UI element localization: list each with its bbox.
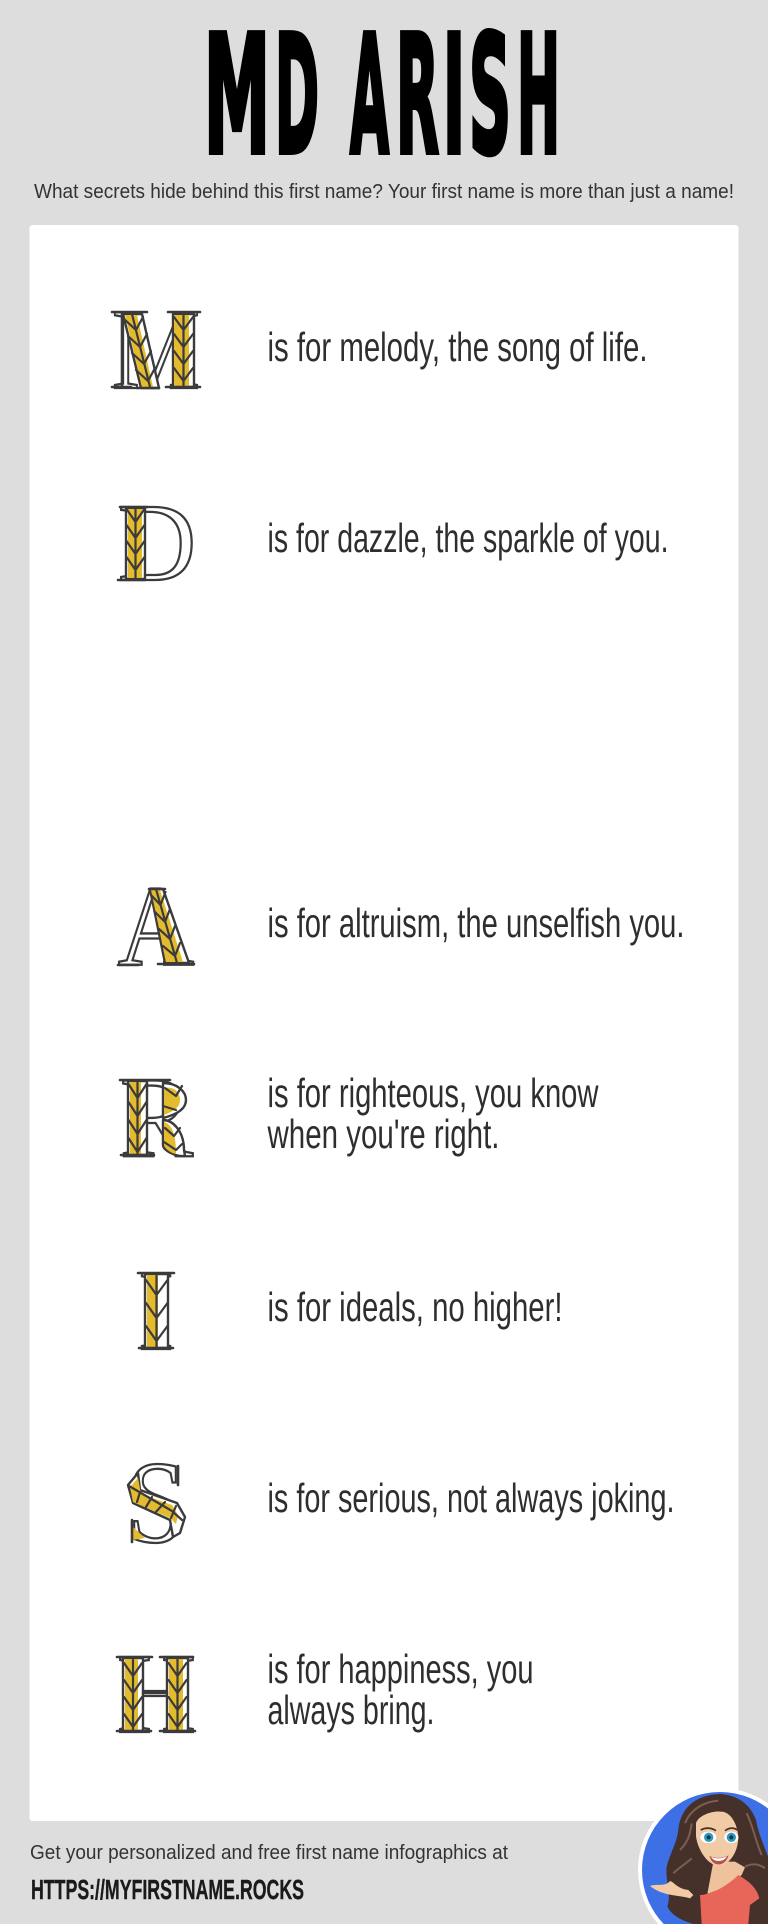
text: R [267,1070,599,1157]
text: R: is for righteous, you know [268,1070,599,1116]
panel: name letters card [30,225,738,1821]
title [204,2,560,191]
letter S icon: S [127,1437,186,1568]
title: M [204,2,270,191]
text: R: when you're right. [267,1111,500,1157]
subtitle: What secrets hide behind this first name? Your first name is more than just a name! [34,180,734,203]
footer text: Get your personalized and free first name infographics at [30,1842,508,1864]
title: I [443,2,465,191]
letter I icon: I [138,1247,174,1374]
footer url: HTTPS://MYFIRSTNAME.ROCKS [31,1874,304,1905]
text: I: is for ideals, no higher! [268,1284,562,1330]
text: H [268,1646,534,1733]
letter D icon: D [118,482,196,605]
letter R icon: R [120,1054,193,1181]
text: H [517,2,560,191]
letter M icon: M [112,286,200,413]
title: S [469,2,511,191]
title: A [350,2,389,191]
title: D [275,2,319,191]
letter H icon: H [117,1630,196,1757]
text: H: always bring. [268,1687,434,1733]
icon: avatar woman in blue circle [638,1788,768,1924]
title: R [396,2,439,191]
letter A icon: A [118,863,194,990]
text: H: is for happiness, you [268,1646,534,1692]
